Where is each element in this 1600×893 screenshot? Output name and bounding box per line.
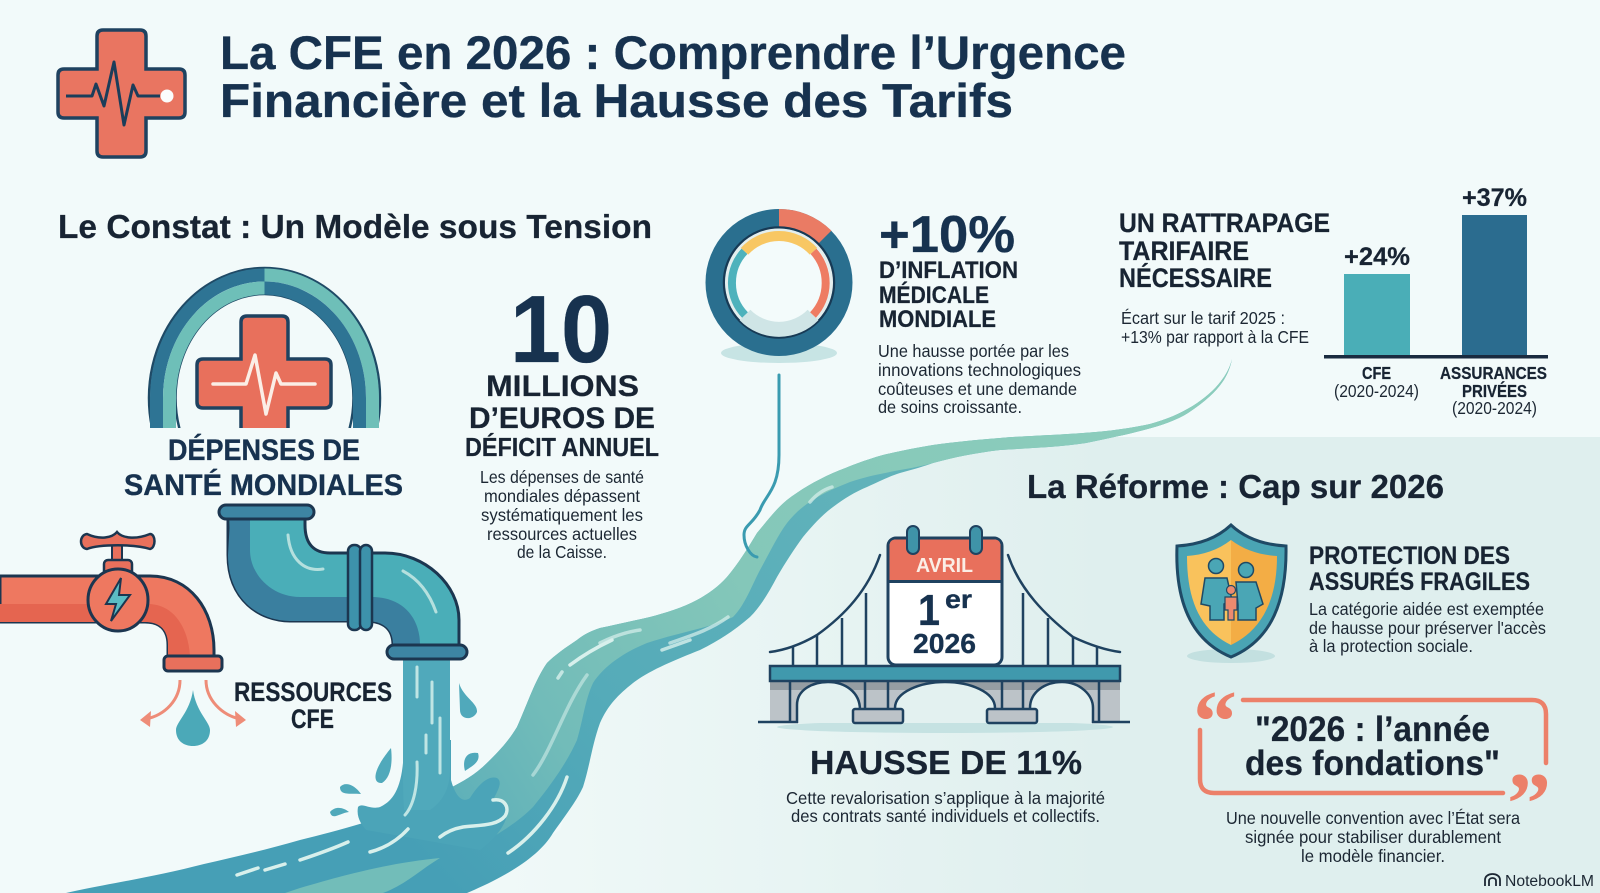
label: health spending: SANTÉ MONDIALES (124, 468, 403, 502)
title: La CFE en 2026 : Comprendre l’Urgence (220, 26, 1126, 79)
heading: Le Constat: Le Constat : Un Modèle sous Tension (58, 208, 652, 245)
text: protection assurés fragiles: PROTECTION DES (1309, 542, 1510, 570)
bar chart: +24% (1344, 243, 1410, 271)
stat: +10% inflation: Une hausse portée par les (878, 341, 1069, 361)
icon: coral arrows and drop (140, 680, 246, 746)
stat: +10% inflation: D’INFLATION (879, 257, 1018, 284)
bar chart: (2020-2024) (1334, 381, 1419, 401)
text: convention: le modèle financier. (1301, 846, 1445, 866)
icon: bridge and calendar (758, 526, 1130, 733)
bar chart (1324, 184, 1548, 418)
bar chart: +37% (1462, 184, 1527, 212)
stat: 10 millions: ressources actuelles (487, 524, 637, 544)
icon: health spending gauge (148, 266, 382, 428)
callout: quote: "2026 : l’année (1255, 710, 1490, 749)
river upper green band (450, 359, 1232, 843)
bar chart: PRIVÉES (1462, 380, 1527, 401)
text: protection assurés fragiles: de hausse pour préserver l'accès (1309, 618, 1546, 638)
calendar (888, 526, 1002, 665)
title: Financière et la Hausse des Tarifs (220, 74, 1013, 127)
stat: +10% inflation: de soins croissante. (878, 397, 1022, 417)
callout: quote: des fondations" (1245, 744, 1500, 783)
icon: waterfall (330, 659, 479, 816)
label: ressources CFE: RESSOURCES (234, 677, 392, 707)
stat: 10 millions: Les dépenses de santé (480, 467, 644, 487)
connector line (744, 375, 779, 557)
text: convention: signée pour stabiliser durablement (1245, 827, 1501, 847)
NotebookLM mark: NotebookLM (1505, 873, 1594, 890)
text: protection assurés fragiles: ASSURÉS FRAGILES (1309, 567, 1530, 596)
stat: 10 millions: mondiales dépassent (484, 486, 640, 506)
stat: 10 millions: 10 (510, 276, 612, 383)
icon: shield family (1177, 525, 1286, 663)
text: rattrapage tarifaire: UN RATTRAPAGE (1119, 208, 1330, 238)
text: protection assurés fragiles: La catégorie aidée est exemptée (1309, 599, 1544, 619)
text: convention (1226, 808, 1520, 866)
stat: 10 millions: DÉFICIT ANNUEL (465, 432, 659, 462)
river splash body (358, 740, 507, 850)
calendar: er (945, 584, 972, 614)
panel: reform background (460, 437, 1600, 893)
title (220, 26, 1126, 127)
icon: blue pipe (219, 505, 467, 659)
label: health spending (124, 433, 403, 502)
stat: +10% inflation: +10% (879, 206, 1015, 264)
text: rattrapage tarifaire: Écart sur le tarif 2025 : (1121, 308, 1285, 328)
stat: 10 millions: D’EUROS DE (469, 402, 655, 435)
stat: 10 millions (465, 276, 659, 562)
label: ressources CFE: CFE (291, 704, 334, 734)
calendar: 2026 (913, 628, 976, 659)
text: rattrapage tarifaire: TARIFAIRE (1119, 236, 1249, 266)
text: protection assurés fragiles (1309, 542, 1546, 656)
stat: +10% inflation: MÉDICALE (879, 281, 989, 309)
icon: red faucet (0, 532, 222, 671)
text: rattrapage tarifaire: NÉCESSAIRE (1119, 262, 1272, 293)
callout: quote: “ (1193, 674, 1237, 771)
stat: +10% inflation: MONDIALE (879, 306, 996, 333)
bridge piers and arches (758, 681, 1130, 723)
text: protection assurés fragiles: à la protection sociale. (1309, 636, 1473, 656)
river (66, 359, 1232, 893)
bar chart: (2020-2024) (1452, 398, 1537, 418)
callout: quote: ” (1507, 756, 1551, 853)
callout: quote (1193, 674, 1551, 853)
heading: La Réforme: La Réforme : Cap sur 2026 (1027, 468, 1444, 505)
calendar: 1 (918, 586, 940, 635)
text: hausse de 11%: HAUSSE DE 11% (810, 744, 1082, 781)
stat: 10 millions: de la Caisse. (517, 542, 607, 562)
text: rattrapage tarifaire (1119, 208, 1330, 347)
text: hausse de 11%: Cette revalorisation s’applique à la majorité (786, 788, 1105, 808)
stat: 10 millions: MILLIONS (486, 370, 639, 403)
calendar: AVRIL (916, 555, 973, 577)
river lighter patch (285, 858, 440, 893)
label: health spending: DÉPENSES DE (168, 433, 360, 467)
stat: 10 millions: systématiquement les (481, 505, 643, 525)
icon: donut inflation (714, 218, 844, 363)
bar chart: CFE (1362, 363, 1391, 383)
stat: +10% inflation: coûteuses et une demande (878, 379, 1077, 399)
text: hausse de 11%: des contrats santé individuels et collectifs. (791, 806, 1100, 826)
label: ressources CFE (234, 677, 392, 734)
stat: +10% inflation: innovations technologiques (878, 360, 1081, 380)
text: hausse de 11% (786, 744, 1105, 826)
icon: logo medical cross (58, 30, 185, 157)
text: rattrapage tarifaire: +13% par rapport à la CFE (1121, 327, 1309, 347)
text: convention: Une nouvelle convention avec l’État sera (1226, 808, 1520, 828)
bar chart: ASSURANCES (1440, 363, 1547, 383)
stat: +10% inflation (878, 206, 1081, 417)
